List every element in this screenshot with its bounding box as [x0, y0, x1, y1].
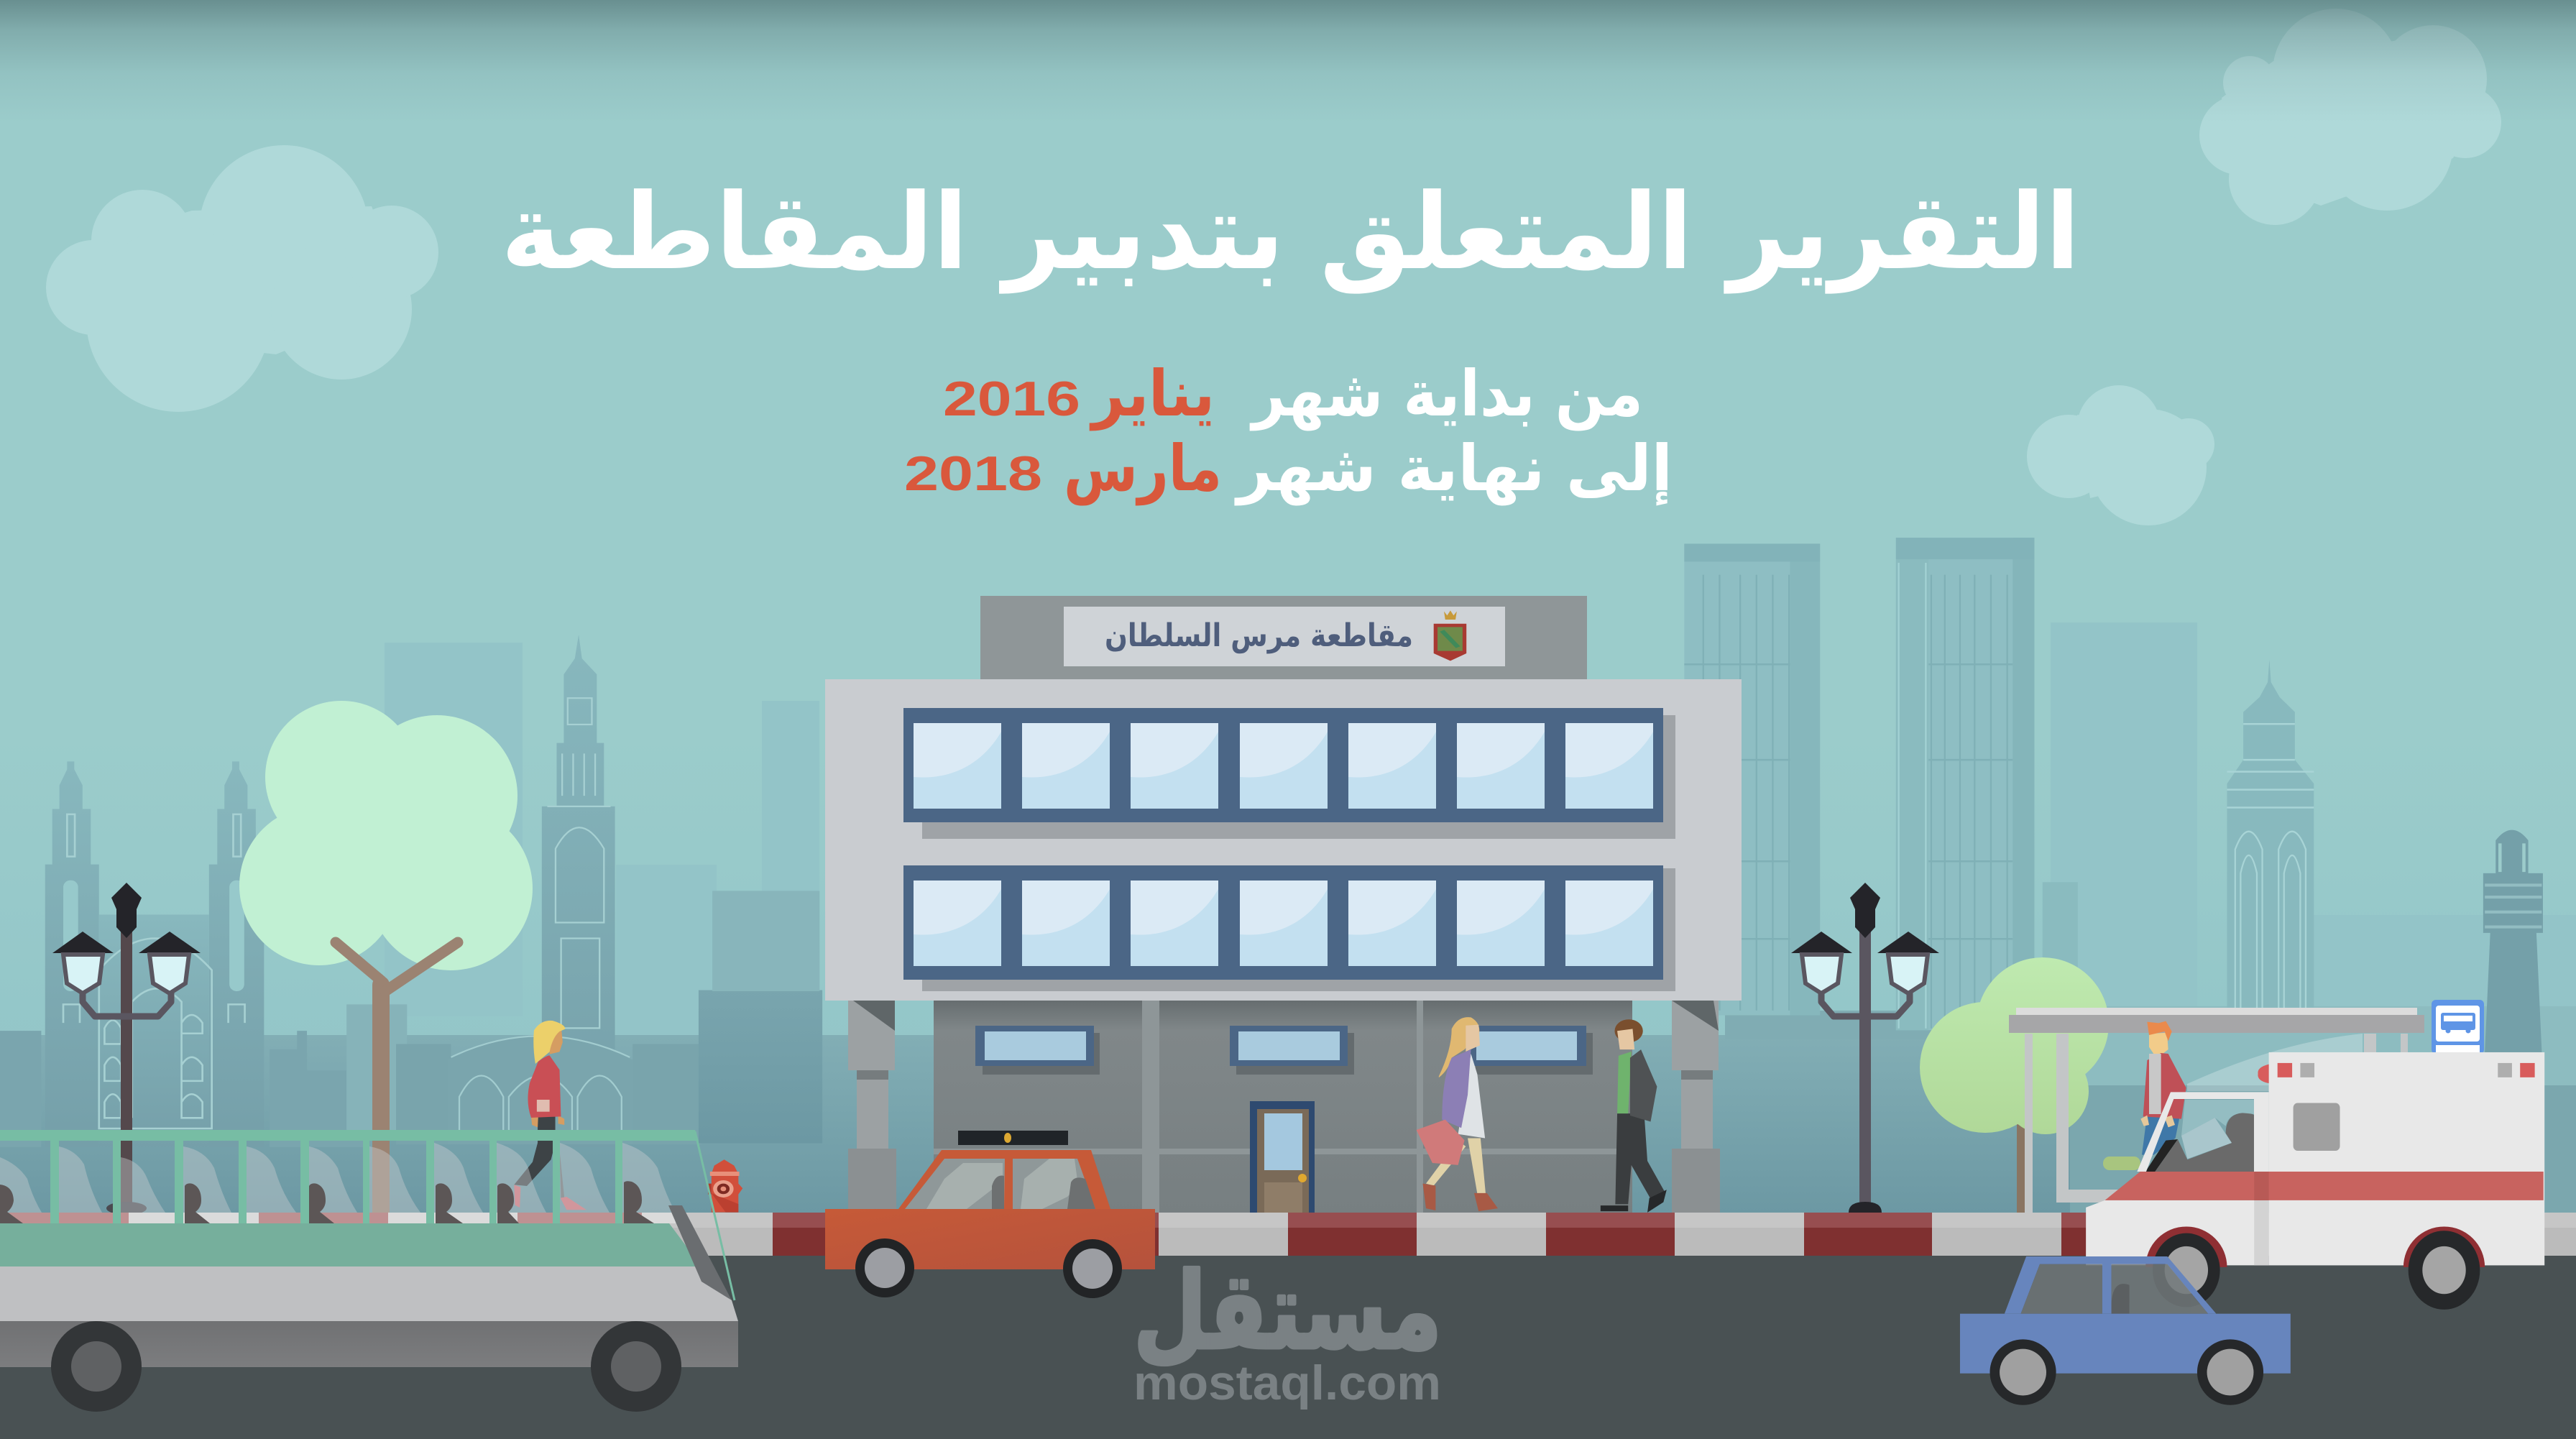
bus wheel front	[591, 1321, 681, 1412]
bus lower body	[0, 1321, 738, 1367]
road	[0, 1256, 2576, 1439]
subtitle line 2: مارس	[1064, 431, 1222, 505]
person: woman with bag	[1417, 1017, 1498, 1211]
car cabin	[898, 1150, 1110, 1209]
bus wheel rear	[51, 1321, 142, 1412]
wheel	[1063, 1239, 1122, 1298]
window row 2	[903, 865, 1663, 980]
lighthouse	[2483, 830, 2543, 1052]
blue car	[1960, 1256, 2291, 1405]
side window	[2294, 1103, 2340, 1151]
ambulance wheel front	[2145, 1226, 2227, 1307]
subtitle line 1: يناير	[1089, 357, 1215, 431]
bench	[2103, 1157, 2140, 1170]
person: man	[1601, 1019, 1667, 1213]
clock tower	[542, 635, 615, 1147]
subtitle line 2: 2018	[904, 446, 1042, 501]
person: woman on left pavement	[514, 1021, 586, 1210]
bus roof rail and pillars	[0, 1130, 699, 1224]
top shading band	[0, 0, 2576, 122]
beam of light	[2187, 1034, 2363, 1091]
roof sign	[958, 1131, 1068, 1145]
hydrant	[708, 1159, 742, 1213]
wheel	[2197, 1339, 2263, 1405]
minaret	[2043, 660, 2314, 1011]
tower B	[1896, 538, 2034, 1030]
cab lower	[2086, 1200, 2269, 1265]
watermark arabic: مستقل	[1133, 1250, 1442, 1373]
street lamp: right	[1791, 883, 1939, 1213]
title: التقرير المتعلق بتدبير المقاطعة	[501, 171, 2080, 294]
curb	[0, 1213, 2576, 1256]
subtitle line 2	[904, 431, 1673, 506]
wheel	[1990, 1339, 2056, 1405]
cab frame	[2137, 1092, 2269, 1172]
subtitle line 1: 2016	[943, 372, 1080, 426]
cloud: small right	[2027, 385, 2214, 525]
ground floor	[934, 1001, 1632, 1213]
tree: left	[239, 701, 533, 1222]
car windows	[905, 1159, 1095, 1209]
right pillar	[1672, 1001, 1720, 1213]
bus green band	[0, 1223, 702, 1266]
subtitle line 2: إلى نهاية شهر	[1234, 431, 1673, 506]
name sign	[1064, 607, 1505, 666]
window row shadows	[922, 715, 1675, 991]
bus	[0, 1130, 738, 1412]
bus windshield	[668, 1131, 735, 1300]
red stripe	[2105, 1172, 2544, 1200]
left pillar	[848, 1001, 896, 1213]
blue car windows	[2021, 1264, 2208, 1314]
door	[1250, 1101, 1315, 1213]
watermark	[1133, 1250, 1442, 1410]
red car	[825, 1131, 1155, 1298]
car body	[825, 1209, 1155, 1269]
city skyline	[0, 538, 2576, 1215]
tree: right	[1920, 957, 2109, 1213]
bus stop sign	[2432, 1000, 2484, 1054]
cloud: left	[46, 145, 438, 412]
sign text: مقاطعة مرس السلطان	[1105, 617, 1413, 654]
ambulance wheel rear	[2404, 1226, 2485, 1310]
bus seats	[0, 1181, 654, 1223]
bus stop posts	[2025, 1034, 2408, 1213]
blue car roof frame	[2005, 1256, 2216, 1314]
watermark latin: mostaql.com	[1133, 1356, 1441, 1410]
blue car body	[1960, 1314, 2291, 1374]
bus window glare	[0, 1143, 676, 1213]
subtitle line 1: من بداية شهر	[1249, 357, 1643, 431]
emblem	[1434, 610, 1466, 661]
sign block	[980, 596, 1587, 679]
ambulance	[2086, 1034, 2544, 1310]
subtitle line 1	[943, 357, 1643, 431]
ground floor windows	[975, 1026, 1593, 1075]
upper floors	[825, 679, 1742, 1001]
wheel	[855, 1238, 914, 1297]
street lamp: left	[52, 883, 201, 1215]
person: man at bus stop	[2140, 1021, 2186, 1155]
bus stop	[2009, 1000, 2484, 1213]
bus stop roof	[2009, 1008, 2424, 1033]
tower A	[1684, 543, 1820, 1015]
ambulance box	[2086, 1052, 2544, 1310]
building	[825, 596, 1742, 1213]
cab interior	[2145, 1100, 2255, 1172]
window row 1	[903, 708, 1663, 822]
far haze blocks	[385, 622, 2576, 1088]
bus silver body	[0, 1266, 738, 1321]
ambulance lights	[2258, 1063, 2535, 1083]
ground skyline band	[0, 1006, 2576, 1215]
cloud: top right	[2199, 9, 2501, 225]
church	[0, 761, 407, 1147]
dome building	[396, 891, 822, 1144]
bus glass over curb	[0, 1213, 676, 1223]
